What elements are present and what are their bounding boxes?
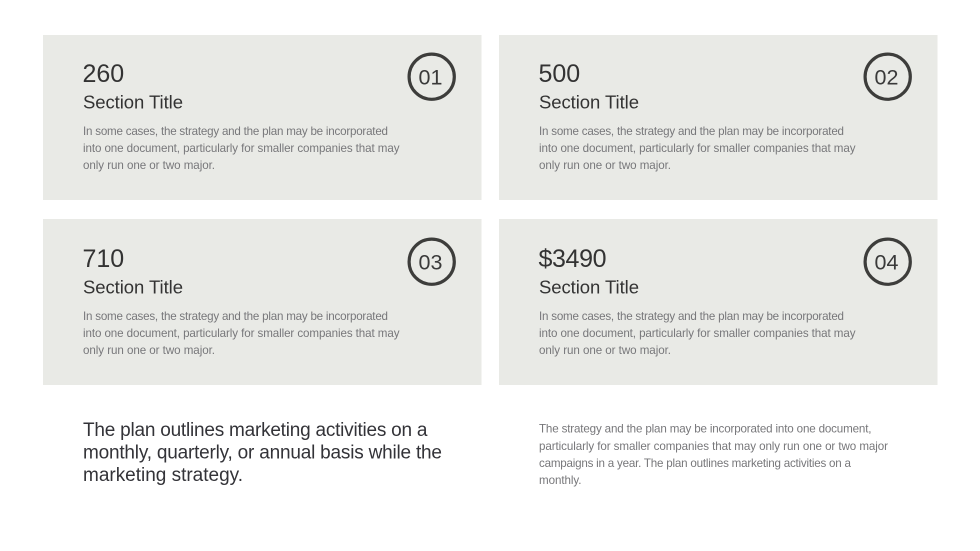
text block: card 3 description: In some cases, the strategy and the plan may be incorporated <box>83 310 388 323</box>
heading: section title 4: Section Title <box>539 276 639 298</box>
panel: card 01 <box>43 35 482 200</box>
text block: supporting paragraph: campaigns in a year. The plan outlines marketing activities on a <box>539 457 852 470</box>
panel: card 03 <box>43 219 482 385</box>
text block: card 1 description: In some cases, the strategy and the plan may be incorporated <box>83 125 388 138</box>
heading: section title 1: Section Title <box>83 92 183 112</box>
text block: supporting paragraph <box>539 422 888 487</box>
icon: numbered circle 03: 03 <box>419 250 442 274</box>
text block: supporting paragraph: The strategy and the plan may be incorporated into one document, <box>539 422 872 436</box>
text block: lead statement: marketing strategy. <box>83 465 243 486</box>
text block: card 3 description: only run one or two major. <box>83 344 215 357</box>
text block: card 3 description <box>83 310 400 357</box>
number: 710: 710 <box>82 245 124 273</box>
icon: numbered circle 01 <box>409 54 454 99</box>
text block: card 3 description: into one document, particularly for smaller companies that may <box>83 327 400 340</box>
number: 260: 260 <box>82 60 124 88</box>
text block: card 4 description: into one document, particularly for smaller companies that may <box>539 327 856 340</box>
text block: lead statement: The plan outlines marketing activities on a <box>83 420 428 441</box>
text block: card 4 description: only run one or two major. <box>539 344 671 357</box>
text block: card 4 description: In some cases, the strategy and the plan may be incorporated <box>539 310 844 323</box>
number: $3490: $3490 <box>538 245 606 273</box>
icon: numbered circle 03 <box>409 239 454 284</box>
number: 500: 500 <box>538 60 580 88</box>
text block: lead statement <box>83 420 442 486</box>
icon: numbered circle 02 <box>865 54 910 99</box>
text block: supporting paragraph: particularly for smaller companies that may only run one or two major <box>539 440 888 453</box>
panel: card 04 <box>499 219 938 385</box>
text block: card 1 description: into one document, particularly for smaller companies that may <box>83 142 400 155</box>
icon: numbered circle 02: 02 <box>875 66 898 90</box>
heading: section title 2: Section Title <box>539 92 639 112</box>
text block: card 1 description: only run one or two major. <box>83 159 215 172</box>
text block: supporting paragraph: monthly. <box>539 474 582 487</box>
text block: card 2 description: In some cases, the strategy and the plan may be incorporated <box>539 125 844 138</box>
icon: numbered circle 04: 04 <box>875 250 898 274</box>
text block: card 2 description: into one document, particularly for smaller companies that may <box>539 142 856 155</box>
text block: lead statement: monthly, quarterly, or annual basis while the <box>83 442 442 464</box>
text block: card 4 description <box>539 310 856 357</box>
panel: card 02 <box>499 35 938 200</box>
text block: card 2 description: only run one or two major. <box>539 159 671 172</box>
text block: card 2 description <box>539 125 856 172</box>
icon: numbered circle 04 <box>865 239 910 284</box>
icon: numbered circle 01: 01 <box>419 66 442 90</box>
heading: section title 3: Section Title <box>83 276 183 298</box>
text block: card 1 description <box>83 125 400 172</box>
